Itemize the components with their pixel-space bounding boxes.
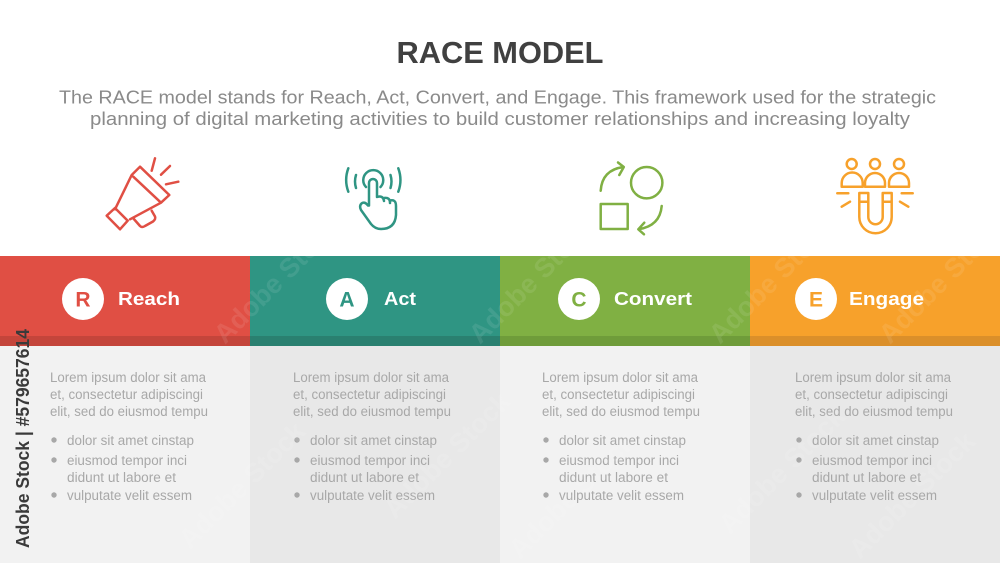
panel: Reach: elit, sed do eiusmod tempu <box>50 404 208 419</box>
panel: Engage: Engage <box>849 288 924 309</box>
stock watermark pattern: Adobe Stock <box>703 211 842 349</box>
panel: Act: Act <box>384 288 416 309</box>
subtitle text block <box>59 86 936 129</box>
panel: Convert: C <box>571 288 587 312</box>
panel: Convert: et, consectetur adipiscingi <box>542 387 695 402</box>
panel: Reach: Lorem ipsum dolor sit ama <box>50 370 206 385</box>
stock watermark pattern: Adobe Stock <box>378 386 517 524</box>
icon: magnet attracting people <box>837 159 913 233</box>
panel: Convert: vulputate velit essem <box>559 488 684 503</box>
panel: Act: eiusmod tempor inci <box>310 453 430 468</box>
stock watermark pattern: Adobe Stock <box>463 211 602 349</box>
stock watermark pattern: Adobe Stock <box>843 426 982 563</box>
icon: megaphone <box>107 158 178 229</box>
panel: Convert: eiusmod tempor inci <box>559 453 679 468</box>
panel: Act: didunt ut labore et <box>310 470 419 485</box>
panel: Engage: eiusmod tempor inci <box>812 453 932 468</box>
panel: Act: Lorem ipsum dolor sit ama <box>293 370 449 385</box>
icon: tapping hand <box>346 168 400 229</box>
stock watermark pattern: Adobe Stock <box>173 416 312 554</box>
panel: Convert: Lorem ipsum dolor sit ama <box>542 370 698 385</box>
panel: Act: vulputate velit essem <box>310 488 435 503</box>
panel: Reach: R <box>75 288 91 312</box>
panel: Engage: Lorem ipsum dolor sit ama <box>795 370 951 385</box>
subtitle text block: planning of digital marketing activities to build customer relationships and increasing loyalty <box>90 108 911 129</box>
panel: Convert: didunt ut labore et <box>559 470 668 485</box>
stock watermark pattern: Adobe Stock <box>713 401 852 539</box>
stock watermark pattern: Adobe Stock <box>208 211 347 349</box>
panel: Convert: dolor sit amet cinstap <box>559 433 686 448</box>
title: RACE MODEL <box>396 35 604 70</box>
icon: shapes with arrows <box>601 162 662 234</box>
panel: Engage: dolor sit amet cinstap <box>812 433 939 448</box>
panel: Engage: E <box>809 288 823 312</box>
panel: Reach <box>0 256 250 563</box>
stock watermark pattern: Adobe Stock <box>503 426 642 563</box>
panel: Reach: dolor sit amet cinstap <box>67 433 194 448</box>
panel: Reach: vulputate velit essem <box>67 488 192 503</box>
subtitle text block: The RACE model stands for Reach, Act, Convert, and Engage. This framework used for the strategic <box>59 86 936 108</box>
panel: Engage <box>750 256 1000 563</box>
panel: Reach: Reach <box>118 288 180 309</box>
panel: Reach: didunt ut labore et <box>67 470 176 485</box>
panel: Convert: elit, sed do eiusmod tempu <box>542 404 700 419</box>
stock watermark pattern <box>173 211 1000 563</box>
panel: Reach: eiusmod tempor inci <box>67 453 187 468</box>
panel: Convert <box>500 256 750 563</box>
panel: Engage: et, consectetur adipiscingi <box>795 387 948 402</box>
panel: Engage: didunt ut labore et <box>812 470 921 485</box>
panel: Engage: vulputate velit essem <box>812 488 937 503</box>
panel: Act <box>250 256 500 563</box>
panel: Act: et, consectetur adipiscingi <box>293 387 446 402</box>
panel: Act: elit, sed do eiusmod tempu <box>293 404 451 419</box>
Adobe Stock vertical credit: Adobe Stock | #579657614 <box>13 329 33 548</box>
panel: Reach: et, consectetur adipiscingi <box>50 387 203 402</box>
panel: Act: A <box>339 288 355 312</box>
panel: Engage: elit, sed do eiusmod tempu <box>795 404 953 419</box>
panel: Convert: Convert <box>614 288 692 309</box>
panel: Act: dolor sit amet cinstap <box>310 433 437 448</box>
